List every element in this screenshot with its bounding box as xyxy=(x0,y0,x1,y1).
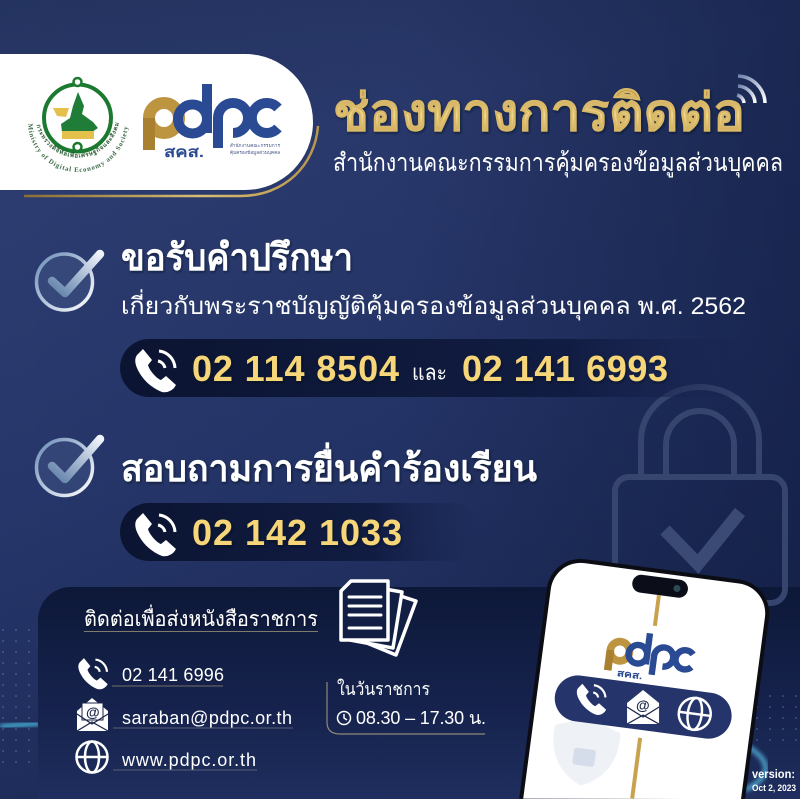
pdpc logo: คุ้มครองข้อมูลส่วนบุคคล xyxy=(230,150,280,156)
heading: สอบถามการยื่นคำร้องเรียน xyxy=(121,442,537,489)
icon: check mark xyxy=(36,439,100,496)
ministry logo: Ministry of Digital Economy and Society xyxy=(28,124,129,172)
gold lines xyxy=(632,595,659,798)
icon: phone xyxy=(135,513,176,556)
ministry logo: กระทรวงดิจิทัลเพื่อเศรษฐกิจและสังคม xyxy=(36,122,119,158)
contact row: phone: 02 141 6996 xyxy=(122,665,224,685)
right glow streak xyxy=(745,745,766,790)
contact row: email xyxy=(77,698,293,731)
contact row: email: saraban@pdpc.or.th xyxy=(122,708,292,728)
white logo panel xyxy=(0,54,313,190)
phone number pill: 02 141 6993 xyxy=(462,348,668,389)
icon: check mark xyxy=(36,254,100,310)
number: 02 142 1033 xyxy=(192,512,402,553)
pdpc logo: สำนักงานคณะกรรมการ xyxy=(230,142,281,148)
icon: email xyxy=(627,690,659,724)
phone mockup xyxy=(519,555,773,799)
ministry logo xyxy=(28,76,129,172)
version note: version: xyxy=(752,767,795,781)
panel heading: ติดต่อเพื่อส่งหนังสือราชการ xyxy=(84,604,318,631)
icon: phone xyxy=(135,349,176,392)
version note xyxy=(752,767,796,794)
bottom contact panel xyxy=(38,477,800,799)
phone pdpc logo: สคส. xyxy=(616,668,643,682)
faint shield xyxy=(547,714,622,790)
numbers: 02 114 8504 xyxy=(192,348,399,389)
phone notch xyxy=(631,574,689,599)
pdpc logo xyxy=(149,84,281,161)
contact row: website xyxy=(76,742,257,772)
background lock body xyxy=(615,477,785,603)
icon: email: @ xyxy=(636,697,650,713)
section: consultation xyxy=(36,237,760,397)
phone icon pill xyxy=(552,673,734,741)
icon: signal waves xyxy=(737,76,765,103)
office hours: 08.30 – 17.30 น. xyxy=(356,708,486,728)
heading: ขอรับคำปรึกษา xyxy=(121,237,353,278)
description: เกี่ยวกับพระราชบัญญัติคุ้มครองข้อมูลส่วนบุคคล พ.ศ. 2562 xyxy=(121,289,746,321)
contact row: phone xyxy=(78,658,224,689)
gold underline curve xyxy=(24,126,318,196)
office hours: ในวันราชการ xyxy=(337,678,430,699)
contact row: website: www.pdpc.or.th xyxy=(121,750,256,770)
phone pdpc logo xyxy=(607,628,695,688)
phone number pill: และ xyxy=(412,360,447,385)
icon: phone xyxy=(577,684,606,715)
icon: documents xyxy=(341,581,416,655)
phone number pill xyxy=(120,503,480,561)
header banner xyxy=(0,54,320,198)
office hours xyxy=(327,678,486,734)
background lock upper part xyxy=(641,387,759,475)
title: ช่องทางการติดต่อ xyxy=(333,84,745,141)
icon: globe xyxy=(677,696,713,732)
left glow streak xyxy=(0,723,40,727)
phone number pill xyxy=(120,339,760,397)
contact row: email: @ xyxy=(86,704,100,720)
pdpc logo: สคส. xyxy=(164,144,204,161)
section: complaint enquiry xyxy=(36,439,537,561)
